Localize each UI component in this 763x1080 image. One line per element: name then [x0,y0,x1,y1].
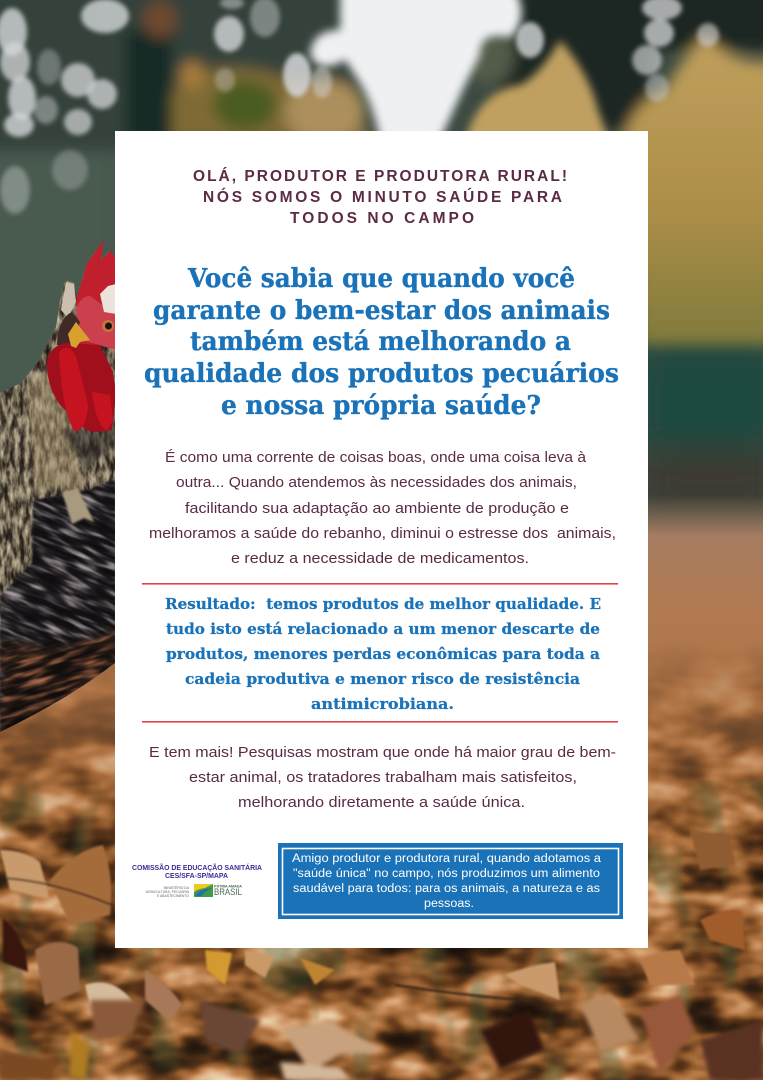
blue message box [278,843,623,919]
intro paragraph: É como uma corrente de coisas boas, onde uma coisa leva à [165,449,587,466]
closing paragraph [149,744,616,811]
main question heading [144,264,619,421]
Pátria Amada Brasil mark [214,884,242,897]
closing paragraph: melhorando diretamente a saúde única. [238,794,525,811]
result callout text: produtos, menores perdas econômicas para toda a [166,645,600,663]
main question heading: também está melhorando a [190,327,571,357]
intro paragraph: melhoramos a saúde do rebanho, diminui o estresse dos animais, [149,525,616,542]
blue message box: saudável para todos: para os animais, a natureza e as [293,883,600,895]
ministry label: MINISTÉRIO DA [164,885,190,890]
result callout text: cadeia produtiva e menor risco de resistência [185,670,580,688]
result callout text: antimicrobiana. [311,695,454,713]
comb and face [47,240,116,432]
intro paragraph: facilitando sua adaptação ao ambiente de produção e [185,500,569,517]
ministry label: E ABASTECIMENTO [157,894,189,898]
main question heading: qualidade dos produtos pecuários [144,359,619,389]
blue message box: "saúde única" no campo, nós produzimos um alimento [293,868,600,880]
main question heading: e nossa própria saúde? [221,391,541,421]
intro paragraph [149,449,616,567]
closing paragraph: estar animal, os tratadores trabalham mais satisfeitos, [189,769,577,786]
intro paragraph: outra... Quando atendemos às necessidades dos animais, [176,474,577,491]
white content panel [115,131,648,948]
greeting heading: OLÁ, PRODUTOR E PRODUTORA RURAL! [193,168,567,185]
intro paragraph: e reduz a necessidade de medicamentos. [231,550,529,567]
ministry label [146,885,190,898]
ministry label: AGRICULTURA, PECUÁRIA [146,890,190,894]
organisation logo block [132,863,263,898]
rooster at left edge [0,240,115,732]
blue message box: Amigo produtor e produtora rural, quando adotamos a [292,853,602,865]
closing paragraph: E tem mais! Pesquisas mostram que onde há maior grau de bem- [149,744,616,761]
result callout text [165,595,601,713]
result callout text: Resultado: temos produtos de melhor qualidade. E [165,595,601,613]
Pátria Amada Brasil mark: PÁTRIA AMADA [214,884,242,888]
result callout text: tudo isto está relacionado a um menor descarte de [166,620,600,638]
greeting heading: NÓS SOMOS O MINUTO SAÚDE PARA [203,188,562,206]
organisation logo block: CES/SFA-SP/MAPA [165,871,229,880]
blurred forest backdrop [0,0,763,510]
Pátria Amada Brasil mark: BRASIL [214,887,242,897]
greeting heading: TODOS NO CAMPO [290,210,474,227]
main question heading: garante o bem-estar dos animais [153,296,610,326]
greeting heading [193,168,567,227]
fallen leaves ground [0,495,763,1080]
organisation logo block: COMISSÃO DE EDUCAÇÃO SANITÁRIA [132,863,263,872]
out-of-focus light circles [0,0,719,214]
main question heading: Você sabia que quando você [187,264,575,294]
blue message box: pessoas. [424,898,474,910]
icon: Brazil flag mark [194,884,213,897]
